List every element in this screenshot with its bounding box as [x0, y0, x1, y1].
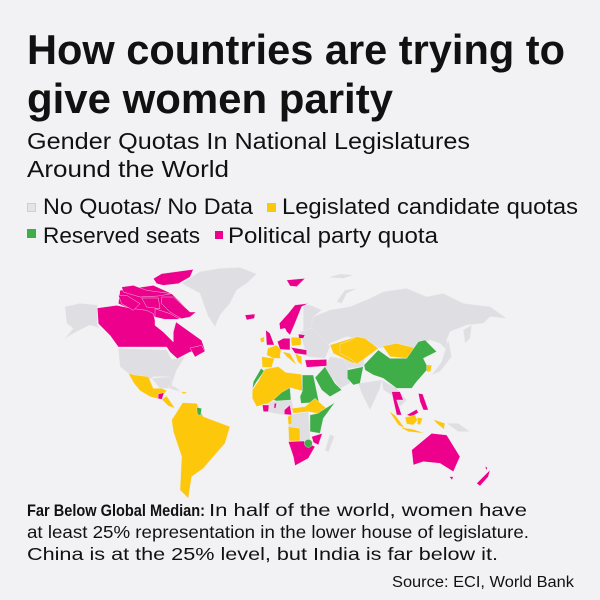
- subtitle: Around the World: [27, 156, 229, 182]
- source: Source: ECI, World Bank: [392, 574, 574, 591]
- Americas and Greenland: [65, 267, 257, 498]
- Africa and Arabia: [252, 367, 342, 466]
- South and East Asia: [340, 337, 452, 433]
- Europe: [245, 303, 327, 367]
- subtitle: Gender Quotas In National Legislatures: [27, 128, 470, 154]
- legend: [27, 194, 578, 248]
- legend item: political party quota: Political party quota: [228, 223, 439, 248]
- subtitle: [27, 128, 470, 182]
- body text: In half of the world, women have: [209, 500, 527, 520]
- world map: [65, 267, 507, 498]
- body text: [27, 500, 529, 564]
- title: How countries are trying to: [27, 26, 565, 73]
- Canada: [97, 269, 205, 359]
- body text: Far Below Global Median:: [27, 502, 205, 520]
- legend item: legislated candidate quotas: Legislated candidate quotas: [282, 194, 578, 219]
- legend item: reserved seats: Reserved seats: [43, 223, 200, 248]
- legend item: no quotas: No Quotas/ No Data: [43, 194, 254, 219]
- body text: China is at the 25% level, but India is far below it.: [27, 544, 498, 564]
- body text: at least 25% representation in the lower house of legislature.: [27, 522, 529, 542]
- title: [27, 26, 565, 122]
- title: give women parity: [27, 75, 394, 122]
- Russia, Asia and islands: [287, 274, 507, 486]
